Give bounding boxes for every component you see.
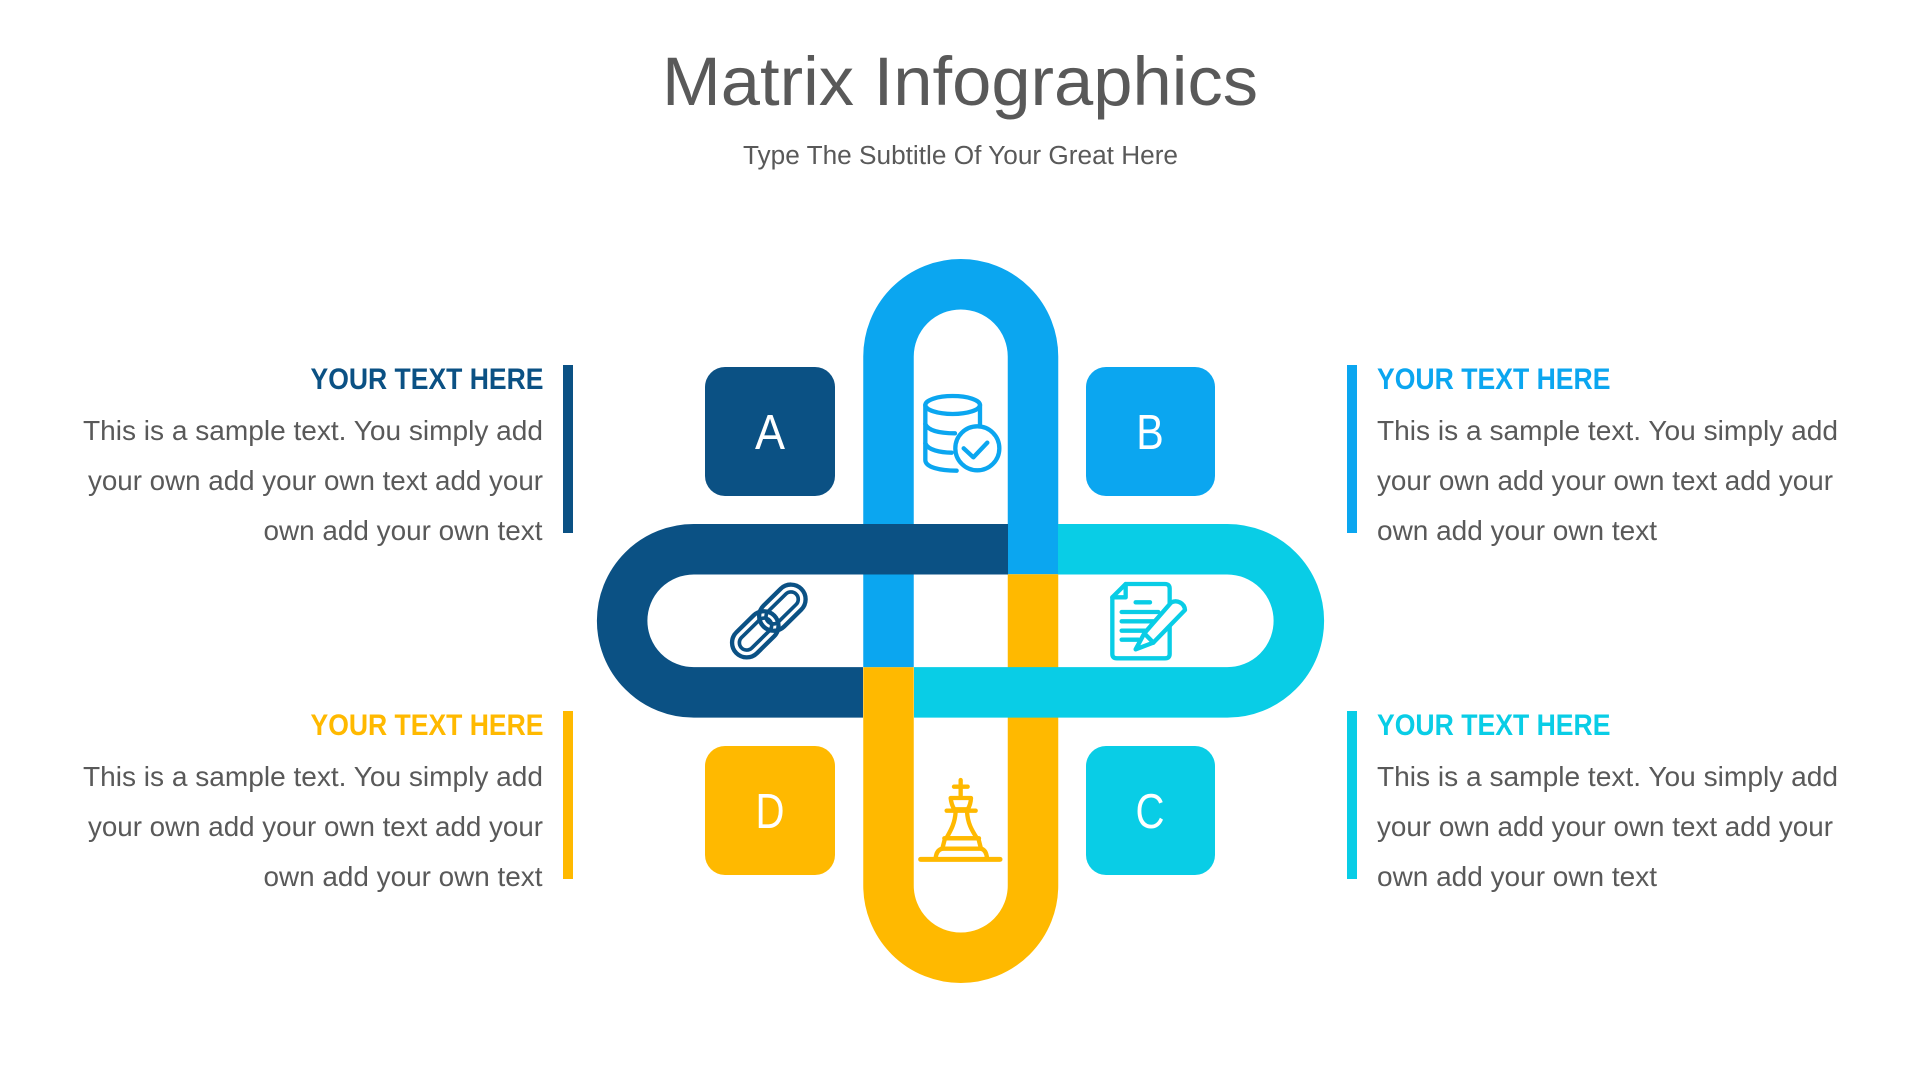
- icon: document with pencil: [1112, 584, 1185, 658]
- body text A: [83, 415, 543, 546]
- icon: chain link: [726, 579, 812, 663]
- body text A: your own add your own text add your: [88, 465, 543, 496]
- cyan right loop: [914, 549, 1299, 692]
- interlocking matrix loops: [622, 284, 1299, 958]
- body text B: [1377, 415, 1838, 546]
- tile C: C: [1136, 785, 1164, 839]
- body text D: This is a sample text. You simply add: [83, 761, 543, 792]
- navy left loop: [622, 549, 1008, 692]
- body text D: own add your own text: [264, 861, 543, 892]
- tile B: B: [1136, 406, 1164, 460]
- accent bar C: [1347, 711, 1357, 879]
- panel: bottom-right text C: [1347, 709, 1838, 892]
- subtitle: Type The Subtitle Of Your Great Here: [743, 142, 1178, 170]
- blue top loop: [888, 284, 1033, 667]
- body text A: own add your own text: [264, 515, 543, 546]
- tile D: [705, 746, 835, 875]
- heading B: YOUR TEXT HERE: [1377, 363, 1610, 396]
- panel: top-right text B: [1347, 363, 1838, 546]
- tile C: [1086, 746, 1215, 875]
- body text C: This is a sample text. You simply add: [1377, 761, 1838, 792]
- tile A: [705, 367, 835, 496]
- icon: database with check: [925, 396, 999, 471]
- icon: chess king: [921, 780, 1000, 859]
- accent bar D: [563, 711, 573, 879]
- tile D: D: [756, 785, 784, 839]
- body text C: your own add your own text add your: [1377, 811, 1833, 842]
- accent bar A: [563, 365, 573, 533]
- title: Matrix Infographics: [662, 43, 1258, 120]
- body text B: This is a sample text. You simply add: [1377, 415, 1838, 446]
- body text B: own add your own text: [1377, 515, 1657, 546]
- body text C: own add your own text: [1377, 861, 1657, 892]
- yellow bottom loop: [888, 574, 1033, 958]
- accent bar B: [1347, 365, 1357, 533]
- body text D: [83, 761, 543, 892]
- tile A: A: [755, 406, 785, 460]
- body text B: your own add your own text add your: [1377, 465, 1833, 496]
- heading D: YOUR TEXT HERE: [310, 709, 544, 742]
- panel: top-left text A: [83, 363, 573, 546]
- body text D: your own add your own text add your: [88, 811, 543, 842]
- body text C: [1377, 761, 1838, 892]
- panel: bottom-left text D: [83, 709, 573, 892]
- body text A: This is a sample text. You simply add: [83, 415, 543, 446]
- tile B: [1086, 367, 1215, 496]
- heading A: YOUR TEXT HERE: [310, 363, 544, 396]
- heading C: YOUR TEXT HERE: [1377, 709, 1610, 742]
